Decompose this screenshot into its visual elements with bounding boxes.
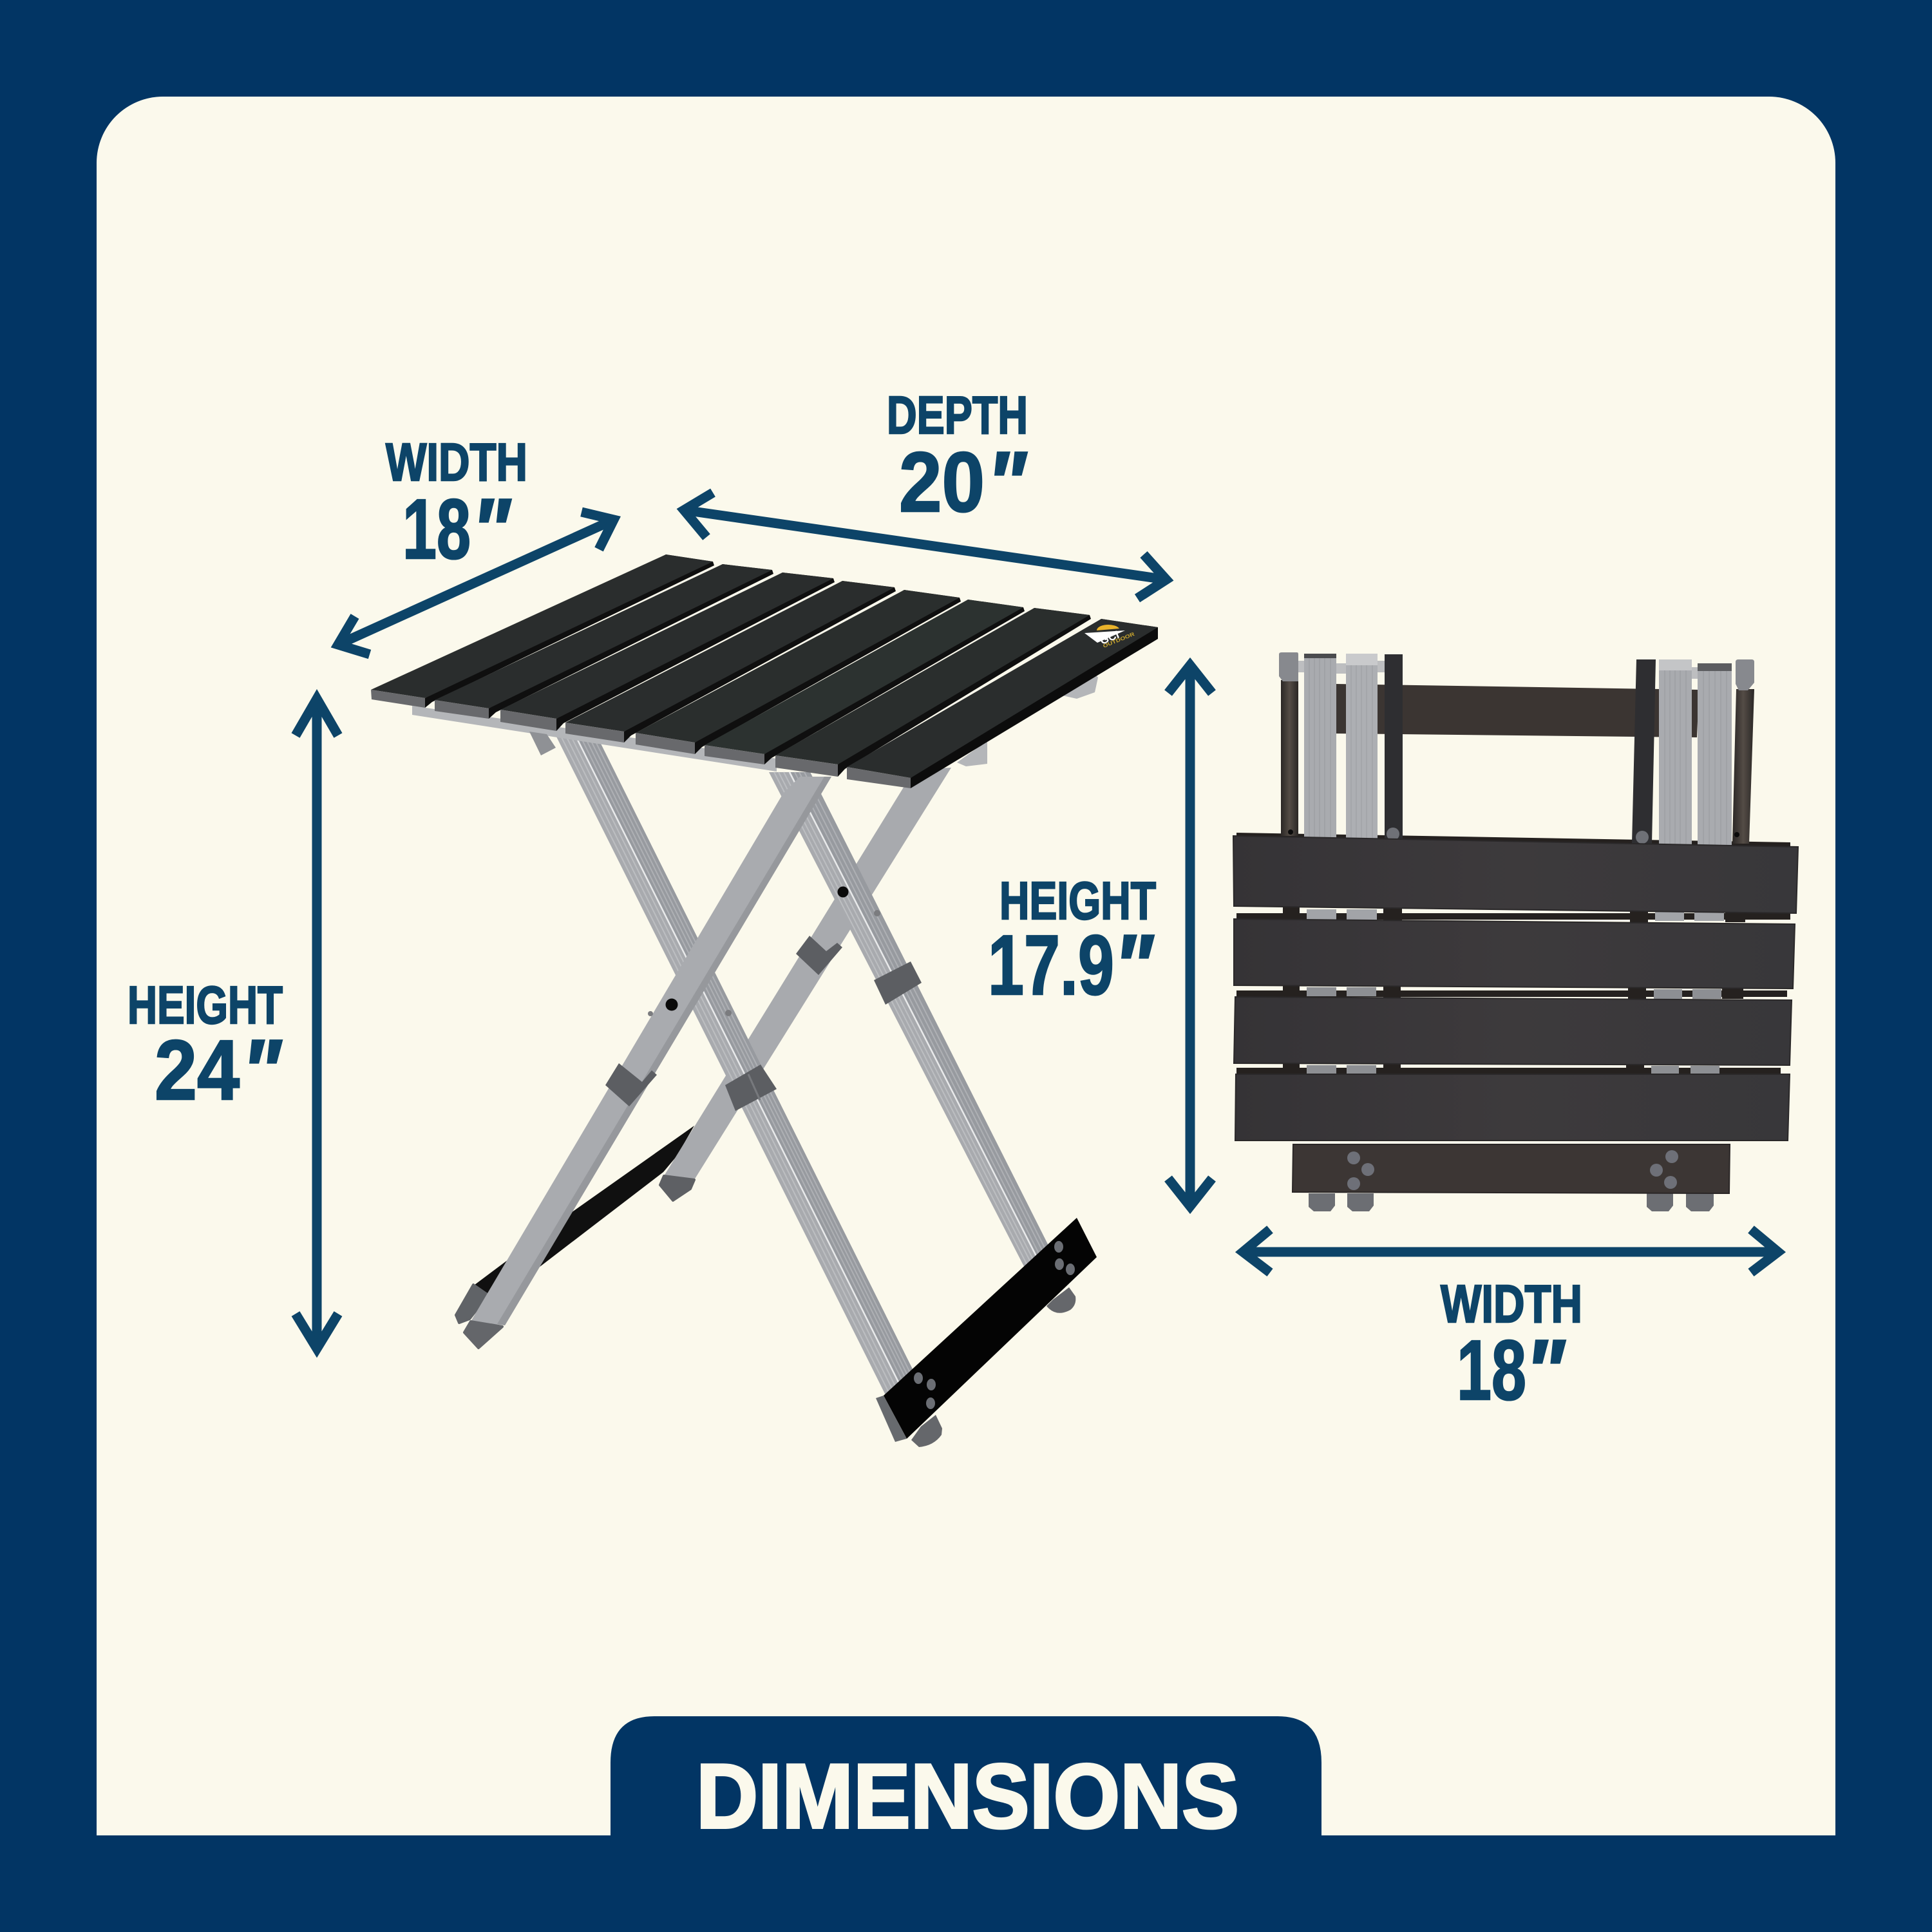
arrow: open table height [296,699,338,1349]
arrow: folded height [1168,665,1212,1206]
logo: GCI Outdoor: OUTDOOR [1102,631,1135,649]
arrow: folded width [1243,1229,1778,1273]
bolts on feet [914,1241,1075,1409]
folded foot pads [1309,1193,1714,1211]
logo: GCI Outdoor [1084,625,1135,649]
leg: front smooth [464,777,831,1348]
label: open height 24 inches: ″ [243,1023,281,1117]
leg: right ribbed [769,772,1052,1275]
left posts and legs [1279,652,1403,840]
label: open height 24 inches [128,975,283,1117]
leg segments visible between slats [1283,907,1745,1075]
foot pad: far right [1046,1287,1075,1313]
under-table brackets [412,670,1098,772]
label: open depth 20 inches [887,385,1028,529]
slat 5 [636,590,961,754]
title: dimensions: DIMENSIONS [696,1745,1239,1848]
slat 8 [847,619,1158,788]
arrow: open table width [338,512,614,654]
panel: dimensions tab [611,1716,1321,1835]
slat 2 [435,564,773,719]
slat 1 [371,554,714,708]
slat 3 [500,573,835,731]
label: open depth 20 inches: DEPTH [887,385,1028,445]
folded foot bolts [1347,1150,1678,1190]
front foot end cap [876,1396,907,1442]
front foot bar [884,1218,1097,1439]
logo: GCI Outdoor: GCI [1098,629,1121,647]
rear thin rails behind slats [1236,833,1790,1074]
label: folded width 18 inches: WIDTH [1441,1274,1582,1334]
folded slat 1 [1233,836,1798,913]
folded slat 3 [1234,997,1792,1065]
folded slat 2 [1234,919,1795,989]
folded foot bar [1293,1144,1730,1193]
arrow: open table depth [684,493,1166,598]
label: folded width 18 inches: 18 [1457,1323,1526,1417]
slat 4 [565,581,896,743]
label: open width 18 inches: ″ [473,482,511,576]
foot pad: front [911,1415,942,1447]
slat 7 [775,608,1091,777]
label: folded width 18 inches: ″ [1527,1323,1565,1417]
folded crossbar [1336,684,1699,737]
label: folded width 18 inches [1441,1274,1582,1417]
label: open width 18 inches [386,432,527,576]
folded slat 4 [1235,1074,1790,1141]
back foot bar [475,1126,694,1294]
label: open height 24 inches: HEIGHT [128,975,283,1035]
leg: rear smooth [660,768,951,1200]
leg: left ribbed [556,735,916,1399]
open table illustration [371,554,1158,1447]
label: open depth 20 inches: ″ [989,435,1027,529]
folded table illustration [1233,652,1798,1211]
label: open height 24 inches: 24 [155,1023,240,1117]
table top slats [371,554,1158,788]
label: folded height 17.9 inches [988,871,1156,1012]
right posts and legs [1632,659,1754,845]
slat 6 [705,600,1025,764]
label: folded height 17.9 inches: HEIGHT [999,871,1156,931]
label: open width 18 inches: WIDTH [386,432,527,492]
back foot end cap [456,1285,488,1323]
label: open width 18 inches: 18 [402,482,471,576]
label: folded height 17.9 inches: ″ [1115,918,1153,1012]
label: open depth 20 inches: 20 [899,435,985,529]
label: folded height 17.9 inches: 17.9 [988,918,1114,1012]
